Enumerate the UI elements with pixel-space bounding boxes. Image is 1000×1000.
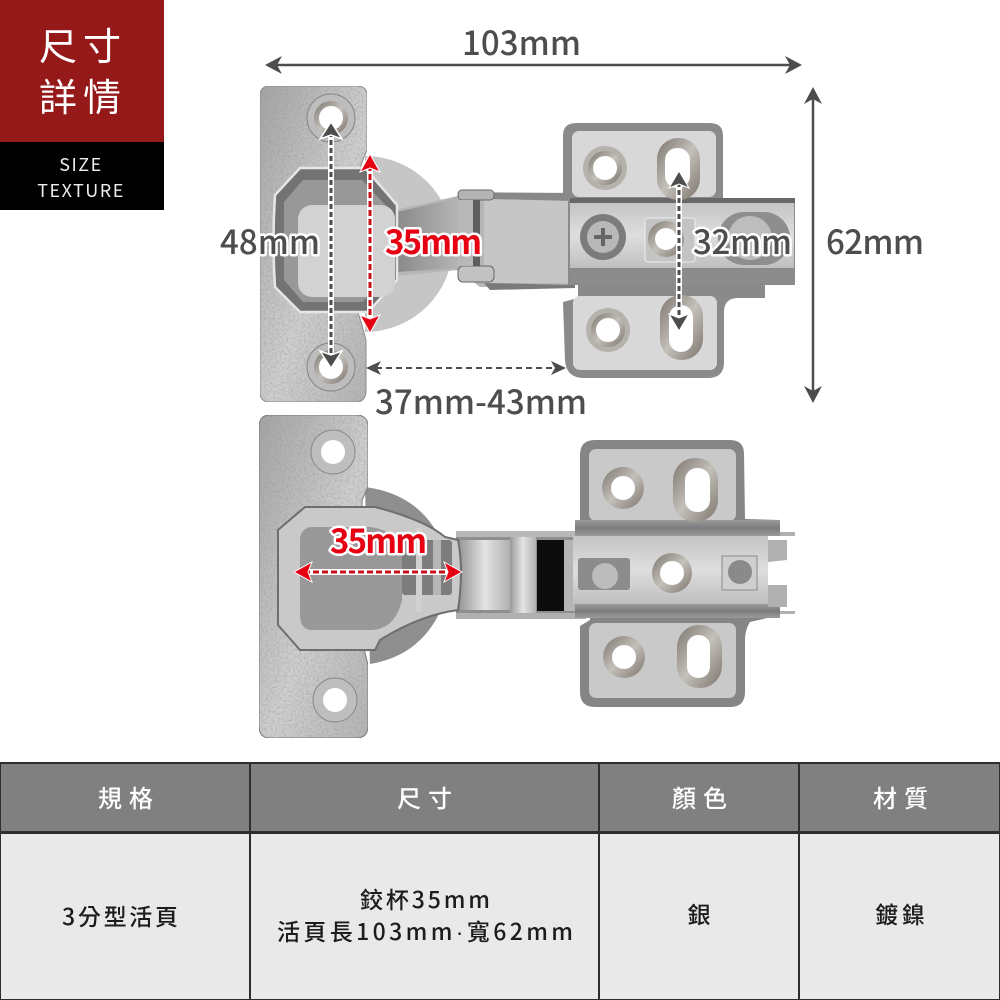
mounting plate (260, 86, 397, 402)
round hole (602, 467, 644, 509)
header: 材質: 材質 (873, 779, 935, 814)
black subtitle block: TEXTURE (37, 177, 125, 203)
panel: section title (0, 0, 164, 210)
arrow: 37mm-43mm gap (366, 361, 566, 375)
header: 顏色: 顏色 (672, 779, 734, 814)
centre hole (652, 553, 692, 593)
arrow: 62mm height (804, 87, 822, 403)
specification table (0, 762, 1000, 1000)
table background and borders (0, 762, 1000, 1000)
black subtitle block (0, 142, 164, 210)
cell: cup size: 鉸杯35mm (360, 881, 490, 915)
slot (673, 458, 718, 522)
screw hole bottom (307, 343, 355, 391)
red title block: 詳 情 (39, 67, 121, 122)
slot (677, 625, 722, 688)
arrow: 35mm cup height (360, 154, 380, 333)
header: 規格: 規格 (98, 779, 160, 814)
cell: length and width: 活頁長103mm·寬62mm (277, 913, 573, 947)
label: 48mm: 48mm (220, 216, 320, 264)
round hole (586, 308, 630, 352)
label: 32mm: 32mm (693, 216, 792, 264)
round hole (583, 146, 627, 190)
right rivet (722, 556, 757, 590)
screw hole bottom (313, 678, 357, 722)
label: red 35mm: 35mm (385, 216, 482, 264)
cup dome (365, 156, 453, 332)
slot (657, 138, 700, 200)
cup recess (278, 507, 461, 650)
cell: 銀: 銀 (688, 896, 710, 930)
hinge photo: top view (260, 86, 795, 402)
arrow: 48mm hole spacing (320, 122, 342, 368)
red title block (0, 0, 164, 142)
left rivet (578, 558, 630, 590)
hinge arm (395, 190, 575, 290)
screw hole top (307, 94, 355, 142)
label: 62mm: 62mm (826, 216, 924, 264)
arrow: 32mm slot spacing (669, 171, 689, 331)
black subtitle block: SIZE (59, 151, 103, 177)
mounting plate (259, 415, 461, 738)
cup recess (274, 168, 397, 312)
arrow: 35mm cup width (294, 562, 462, 582)
arrow: 103mm width (265, 56, 802, 74)
right tabs (768, 532, 795, 614)
label: 37mm-43mm: 37mm-43mm (375, 376, 587, 424)
red title block: 尺 寸 (39, 16, 121, 71)
hinge arm (456, 531, 586, 619)
header: 尺寸: 尺寸 (397, 779, 459, 814)
label: bottom red 35mm: 35mm (330, 515, 427, 563)
adjusting slot (718, 212, 790, 265)
cell: 鍍鎳: 鍍鎳 (875, 896, 925, 930)
mounting base (573, 440, 795, 707)
hinge photo: bottom view (259, 415, 795, 738)
slot (660, 295, 703, 360)
label: 103mm: 103mm (462, 17, 581, 65)
mounting base (563, 123, 795, 378)
cell: 3分型活頁: 3分型活頁 (62, 898, 178, 932)
cup dome (365, 487, 445, 664)
screw (580, 214, 626, 260)
screw hole top (311, 430, 355, 474)
round hole (603, 636, 645, 678)
centre bracket hole (645, 218, 695, 262)
